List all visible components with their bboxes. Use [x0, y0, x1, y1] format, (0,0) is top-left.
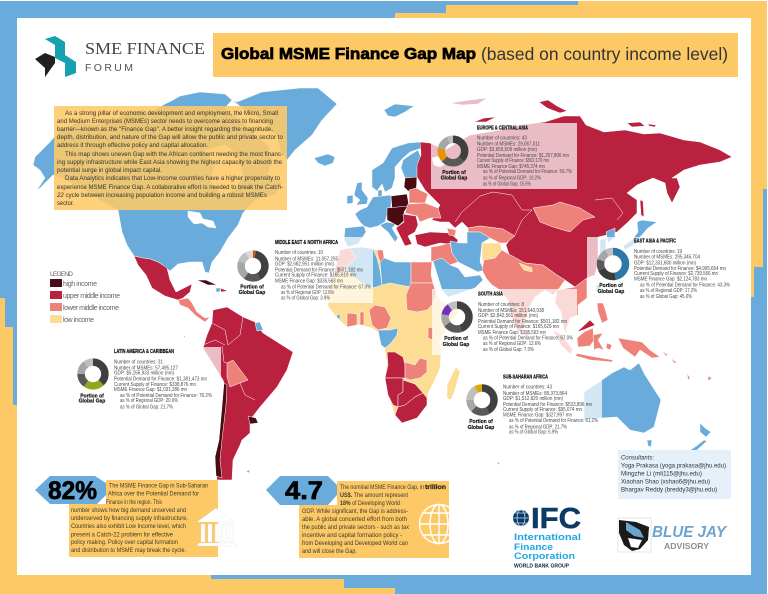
donut: Latin America and Caribbean [81, 362, 105, 386]
panel: East Asia and Pacific: Number of MSMEs: 295,345,704 [634, 254, 700, 260]
panel: South Asia: as % of Global Gap: 7.0% [483, 347, 534, 353]
panel: consultants [618, 450, 731, 499]
callout: 4.7 trillion: the public and private sectors - such as tax [302, 525, 409, 531]
panel: East Asia and Pacific: Global Gap [598, 289, 624, 295]
panel: East Asia and Pacific: Number of countries: 19 [634, 249, 682, 255]
panel: East Asia and Pacific: as % of Potential Demand for Finance: 43.3% [640, 282, 730, 288]
panel: consultants: Mingzhe Li (mli115@jhu.edu) [621, 472, 702, 478]
panel: Sub-Saharan Africa: Global Gap [468, 425, 494, 431]
intro text panel: 22 cycle between increasing population income and building a robust MSMEs [56, 193, 267, 199]
panel: Europe and Central Asia: Global Gap [441, 176, 467, 182]
panel: Latin America and Caribbean: as % of Regional GDP: 20.0% [120, 398, 178, 404]
callout: 82 percent: policy making. Policy over capital formation [71, 540, 178, 546]
panel: South Asia: Number of MSMEs: 151,640,938 [478, 308, 544, 314]
panel: South Asia [443, 292, 573, 353]
panel: Latin America and Caribbean: Number of MSMEs: 57,495,127 [114, 366, 178, 372]
panel: consultants: Xiaohan Shao (xshao6@jhu.edu) [621, 480, 710, 486]
panel: South Asia: Current Supply of Finance: $165,629 mn [478, 324, 559, 330]
panel: South Asia: as % of Regional GDP: 12.6% [483, 341, 541, 347]
panel: East Asia and Pacific: Current Supply of Finance: $2,739,566 mn [634, 271, 718, 277]
panel: Europe and Central Asia: GDP: $3,655,509 million (mn) [477, 147, 537, 153]
panel: Sub-Saharan Africa: SUB-SAHARAN AFRICA [503, 374, 548, 380]
legend: upper middle income [63, 293, 120, 300]
logo: Blue Jay Advisory [618, 518, 728, 552]
callout: 82 percent: 82% [48, 477, 97, 505]
panel: Latin America and Caribbean: MSME Finance Gap: $1,031,286 mn [114, 387, 187, 393]
legend: lower middle income [63, 305, 119, 312]
callout: 82 percent: and distribution to MSME may break the cycle. [71, 548, 186, 554]
panel: Europe and Central Asia: Portion of [442, 170, 466, 176]
panel: Europe and Central Asia: EUROPE & CENTRAL ASIA [477, 126, 528, 132]
callout: 4.7 trillion: 4.7 [285, 477, 323, 505]
panel: Latin America and Caribbean: LATIN AMERICA & CARIBBEAN [114, 349, 174, 355]
panel: Europe and Central Asia: Number of MSMEs: 29,067,011 [477, 142, 540, 148]
logo: SME Finance Forum [35, 36, 205, 77]
panel: Middle East and North Africa: as % of Global Gap: 3.9% [281, 296, 330, 302]
panel: Middle East and North Africa: GDP: $2,682,951 million (mn) [275, 262, 334, 268]
donut: East Asia and Pacific [600, 252, 626, 276]
logo: IFC: International [514, 532, 581, 543]
panel: Sub-Saharan Africa: MSME Finance Gap: $327,997 mn [503, 412, 572, 418]
panel: Middle East and North Africa: Number of countries: 10 [275, 250, 323, 256]
panel: Europe and Central Asia: Number of countries: 43 [477, 136, 527, 142]
panel: Europe and Central Asia: Current Supply of Finance: $502,170 mn [477, 158, 549, 164]
callout: 4.7 trillion [266, 476, 458, 558]
panel: Middle East and North Africa: Global Gap [239, 290, 265, 296]
logo: IFC [513, 503, 581, 570]
panel: South Asia: GDP: $2,842,561 million (mn) [478, 313, 538, 319]
callout: 82 percent: Finance in the region. This [106, 500, 162, 506]
region: Africa [328, 247, 462, 423]
panel: Europe and Central Asia [441, 126, 572, 188]
world map [33, 88, 732, 480]
panel: East Asia and Pacific: as % of Global Gap: 45.0% [640, 294, 692, 300]
panel: Sub-Saharan Africa: Current Supply of Finance: $95,074 mn [503, 407, 582, 413]
logo: IFC: Finance [514, 542, 553, 553]
panel: Europe and Central Asia: Potential Demand for Finance: $1,257,806 mn [477, 153, 569, 159]
legend: LEGEND [50, 271, 73, 278]
logo: SME Finance Forum: SME FINANCE [85, 39, 205, 58]
panel: Sub-Saharan Africa: Number of countries: 43 [503, 384, 552, 390]
panel: Latin America and Caribbean: as % of Potential Demand for Finance: 76.2% [120, 393, 212, 399]
panel: South Asia: SOUTH ASIA [478, 292, 503, 298]
callout: 4.7 trillion: GDP. While significant, the Gap is address- [302, 509, 408, 515]
legend: high income [63, 281, 97, 288]
panel: Sub-Saharan Africa: as % of Global Gap: 6.9% [509, 430, 558, 436]
intro text panel: sector. [57, 201, 74, 207]
panel: East Asia and Pacific: Potential Demand for Finance: $4,905,654 mn [634, 266, 726, 272]
panel: consultants: Yoga Prakasa (yoga.prakasa@jhu.edu) [621, 464, 726, 470]
panel: Middle East and North Africa: as % of Potential Demand for Finance: 67.0% [281, 284, 371, 290]
callout: 4.7 trillion: and will close the Gap. [302, 549, 357, 555]
panel: South Asia: Number of countries: 8 [478, 302, 524, 308]
overlay: regional panels [110, 123, 733, 437]
panel: consultants: Bhargav Reddy (breddy3@jhu.edu) [621, 488, 717, 494]
panel: Middle East and North Africa: as % of Regional GDP: 12.6% [281, 290, 334, 296]
region: Middle East and Central Asia [431, 226, 565, 337]
panel: Latin America and Caribbean: Global Gap [79, 398, 105, 404]
panel: South Asia: Global Gap [443, 342, 469, 348]
donut: Sub-Saharan Africa [470, 388, 494, 412]
callout: 82 percent: Africa over the Potential Demand for [108, 492, 199, 498]
callout: 4.7 trillion: US$. The amount represent [340, 493, 408, 499]
callout: 82 percent [35, 476, 237, 557]
region: Europe [314, 104, 422, 247]
panel: East Asia and Pacific [598, 238, 730, 300]
intro text panel: As a strong pillar of economic development and employment, the Micro, Small [65, 111, 278, 117]
panel: East Asia and Pacific: as % of Regional GDP: 17.2% [640, 288, 697, 294]
callout: 4.7 trillion: trillion [425, 485, 446, 491]
title bar: (based on country income level) [481, 44, 728, 64]
legend: low income [63, 317, 94, 324]
panel: East Asia and Pacific: Portion of [599, 283, 623, 289]
logo: IFC: WORLD BANK GROUP [514, 564, 570, 570]
panel: Latin America and Caribbean: Number of countries: 31 [114, 360, 163, 366]
intro text panel: experience MSME Finance Gap. A collaborative effort is needed to break the Catch- [57, 185, 283, 191]
callout: 4.7 trillion: incentive and capital formation policy - [302, 533, 402, 539]
callout: 4.7 trillion: The nominal MSME Finance Gap, in [340, 485, 424, 491]
panel: Middle East and North Africa: Current Supply of Finance: $165,619 mn [275, 272, 356, 278]
region: Mexico and Caribbean [134, 256, 228, 322]
icon: globe [420, 504, 458, 544]
panel: Latin America and Caribbean: Portion of [80, 394, 104, 400]
callout: 4.7 trillion: from Developing and Developed World can [302, 541, 408, 547]
panel: South Asia: Portion of [444, 336, 468, 342]
panel: Latin America and Caribbean: GDP: $5,156,933 million (mn) [114, 370, 174, 376]
region: Russia, China and Kazakhstan [417, 98, 732, 287]
region: North America [33, 88, 337, 273]
region: Ukraine and Belarus [396, 188, 458, 247]
intro text panel: potential surge in global impact capital. [57, 168, 162, 174]
panel: Sub-Saharan Africa: GDP: $1,512,820 million (mn) [503, 396, 563, 402]
logo: IFC: Corporation [514, 551, 575, 562]
panel: Middle East and North Africa: Portion of [240, 284, 264, 290]
panel: Latin America and Caribbean [79, 349, 212, 410]
panel: Europe and Central Asia: as % of Regional GDP: 19.2% [483, 176, 541, 182]
panel: East Asia and Pacific: MSME Finance Gap: $2,124,783 mn [634, 276, 707, 282]
donut: Europe and Central Asia [441, 139, 465, 163]
panel: Middle East and North Africa [239, 240, 371, 302]
region: Asia Pacific [497, 220, 712, 465]
panel: South Asia: MSME Finance Gap: $335,563 mn [478, 330, 546, 336]
donut: Middle East and North Africa [241, 254, 265, 278]
intro text panel: Data Analytics indicates that Low-Income countries have a higher propensity to [65, 176, 281, 182]
panel: Sub-Saharan Africa: Portion of [469, 419, 493, 425]
callout: 82 percent: number shows how big demand unserved and [71, 508, 186, 514]
panel: East Asia and Pacific: EAST ASIA & PACIFIC [634, 238, 676, 244]
intro text panel: This map shows uneven Gap with the African continent needing the most financ- [65, 152, 283, 158]
panel: Sub-Saharan Africa: as % of Potential Demand for Finance: 61.2% [509, 418, 598, 424]
logo: Blue Jay Advisory: ADVISORY [664, 541, 709, 551]
donut: South Asia [445, 305, 469, 329]
panel: East Asia and Pacific: GDP: $12,331,680 million (mn) [634, 260, 696, 266]
panel: Middle East and North Africa: MIDDLE EAST & NORTH AFRICA [275, 240, 338, 246]
logo: SME Finance Forum: FORUM [85, 62, 133, 74]
intro text panel [54, 106, 287, 210]
callout: 82 percent: underserved by financing supply infrastructure. [71, 516, 188, 522]
panel: Europe and Central Asia: MSME Finance Gap: $745,374 mn [477, 164, 545, 170]
callout: 82 percent: Countries also exhibit Low Income level, which [71, 524, 186, 530]
panel: South Asia: Potential Demand for Finance: $501,182 mn [478, 319, 567, 325]
callout: 4.7 trillion: able. A global concerted effort from both [302, 517, 407, 523]
intro text panel: and Medium Enterprises (MSMEs) sector needs to overcome access to financing [57, 119, 273, 125]
panel: Sub-Saharan Africa: Potential Demand for Finance: $533,896 mn [503, 402, 592, 408]
panel: Latin America and Caribbean: as % of Global Gap: 21.7% [120, 404, 173, 410]
intro text panel: barrier—known as the "Finance Gap". A better insight regarding the magnitude, [57, 127, 273, 133]
panel: Europe and Central Asia: as % of Global Gap: 15.5% [483, 182, 531, 188]
intro text panel: ing supply infrastructure while East Asia showing the highest capacity to absorb the [57, 160, 283, 166]
panel: Middle East and North Africa: MSME Finance Gap: $335,563 mn [275, 278, 343, 284]
icon: bank building [197, 508, 237, 546]
title bar: Global MSME Finance Gap Map [221, 46, 476, 63]
legend [50, 271, 120, 324]
intro text panel: address it through effective policy and capital allocation. [57, 143, 208, 149]
panel: Europe and Central Asia: as % of Potential Demand for Finance: 59.7% [483, 169, 572, 175]
panel: Sub-Saharan Africa: as % of Regional GDP: 21.7% [509, 424, 567, 430]
callout: 82 percent: The MSME Finance Gap in Sub-Saharan [109, 484, 208, 490]
panel: South Asia: as % of Potential Demand for Finance: 67.0% [483, 336, 573, 342]
intro text panel: depth, distribution, and nature of the Gap will allow the public and private sector to [57, 135, 284, 141]
panel: Sub-Saharan Africa [468, 374, 598, 436]
panel: Sub-Saharan Africa: Number of MSMEs: 89,373,864 [503, 391, 567, 397]
logo: Blue Jay Advisory: BLUE JAY [652, 524, 728, 541]
panel: Latin America and Caribbean: Potential Demand for Finance: $1,381,473 mn [114, 376, 207, 382]
callout: 4.7 trillion: 18% of Developing World [340, 501, 400, 507]
panel: Middle East and North Africa: Potential Demand for Finance: $501,182 mn [275, 268, 363, 274]
panel: consultants: Consultants: [621, 456, 654, 462]
region: South America [183, 307, 293, 480]
callout: 82 percent: present a Catch-22 problem for effective [71, 532, 174, 538]
panel: Latin America and Caribbean: Current Supply of Finance: $338,876 mn [114, 382, 196, 388]
title bar [213, 33, 738, 77]
logo: IFC: IFC [531, 503, 581, 535]
panel: Middle East and North Africa: Number of MSMEs: 11,057,255 [275, 256, 338, 262]
